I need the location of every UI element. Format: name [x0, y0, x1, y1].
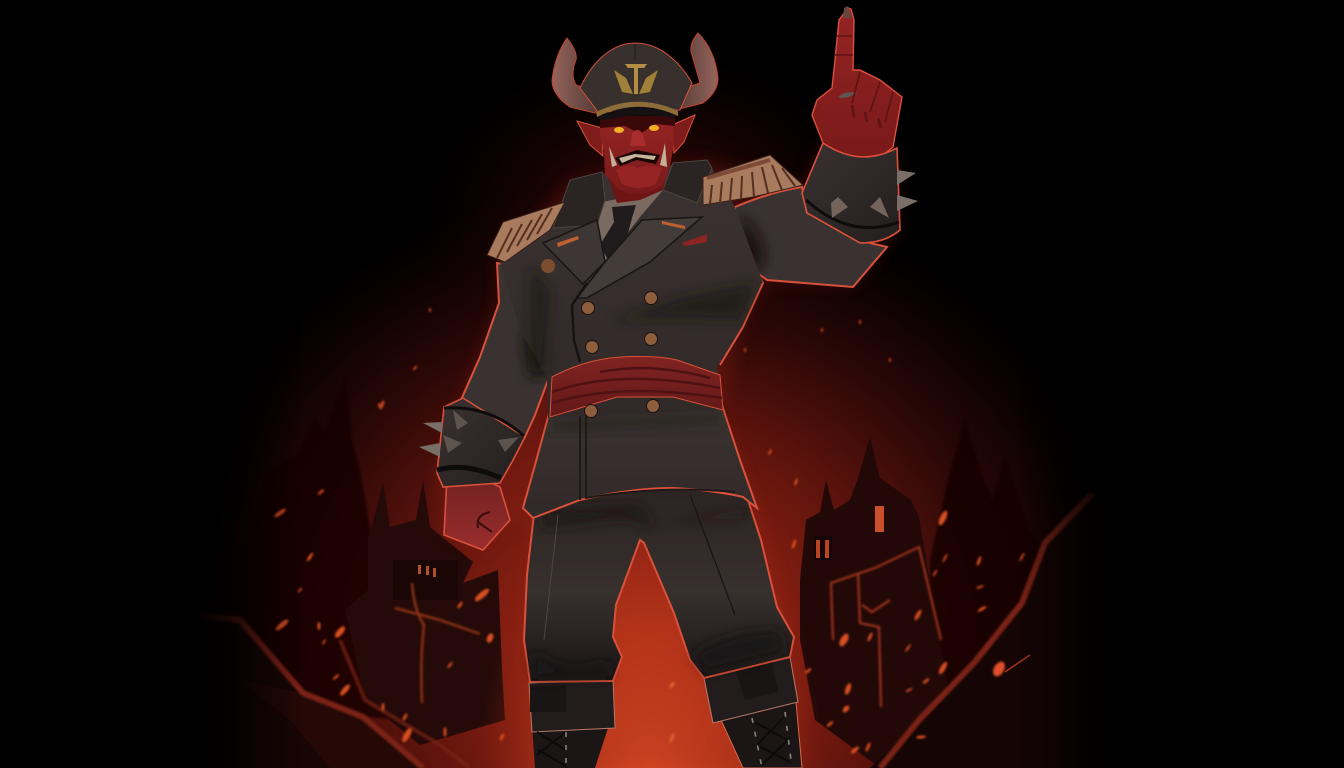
lava cracks — [831, 547, 941, 707]
badge — [541, 259, 555, 273]
embers — [273, 308, 1025, 755]
coat skirt — [523, 405, 757, 518]
figure rim glow — [437, 143, 900, 768]
raised arm sleeve — [735, 187, 887, 300]
ears — [577, 115, 695, 156]
background: right foreground rocks — [870, 493, 1130, 768]
left lapel — [543, 220, 605, 284]
rank bars — [557, 221, 685, 247]
brow shadow — [600, 116, 675, 134]
horns — [552, 33, 718, 113]
neck — [604, 160, 670, 203]
cap badge — [614, 64, 658, 94]
coat front edge — [572, 283, 587, 362]
left boot — [529, 680, 615, 768]
lowered arm — [419, 263, 552, 550]
chin — [616, 166, 662, 188]
mouth and teeth — [615, 150, 660, 166]
tusks — [609, 143, 667, 167]
lava cracks — [395, 583, 480, 703]
background: left foreground rocks — [197, 615, 470, 768]
background: right ruined castle — [800, 437, 950, 768]
raised cuff and spikes — [802, 143, 918, 243]
peaked cap — [580, 43, 692, 120]
chest shadow — [530, 265, 755, 372]
trousers — [524, 480, 794, 682]
collar — [553, 160, 712, 228]
buttons — [582, 292, 658, 354]
background: central light column — [470, 450, 830, 768]
background: far rock spires right — [930, 420, 1080, 720]
eyes — [614, 127, 624, 133]
lower coat buttons — [584, 400, 660, 418]
cuff and spikes — [419, 398, 525, 487]
background: left ruined castle — [345, 480, 505, 745]
shirt and tie — [597, 190, 663, 262]
jacket torso — [500, 160, 763, 418]
figure: demon officer — [419, 6, 918, 768]
sash — [550, 356, 723, 417]
raised hand with pointing finger — [812, 6, 902, 163]
right boot — [704, 657, 802, 768]
head — [577, 115, 695, 203]
lowered fist — [444, 470, 510, 550]
face — [600, 118, 674, 194]
epaulettes — [487, 155, 803, 262]
background: far rock spires left — [205, 377, 400, 720]
right lapel — [577, 217, 702, 298]
